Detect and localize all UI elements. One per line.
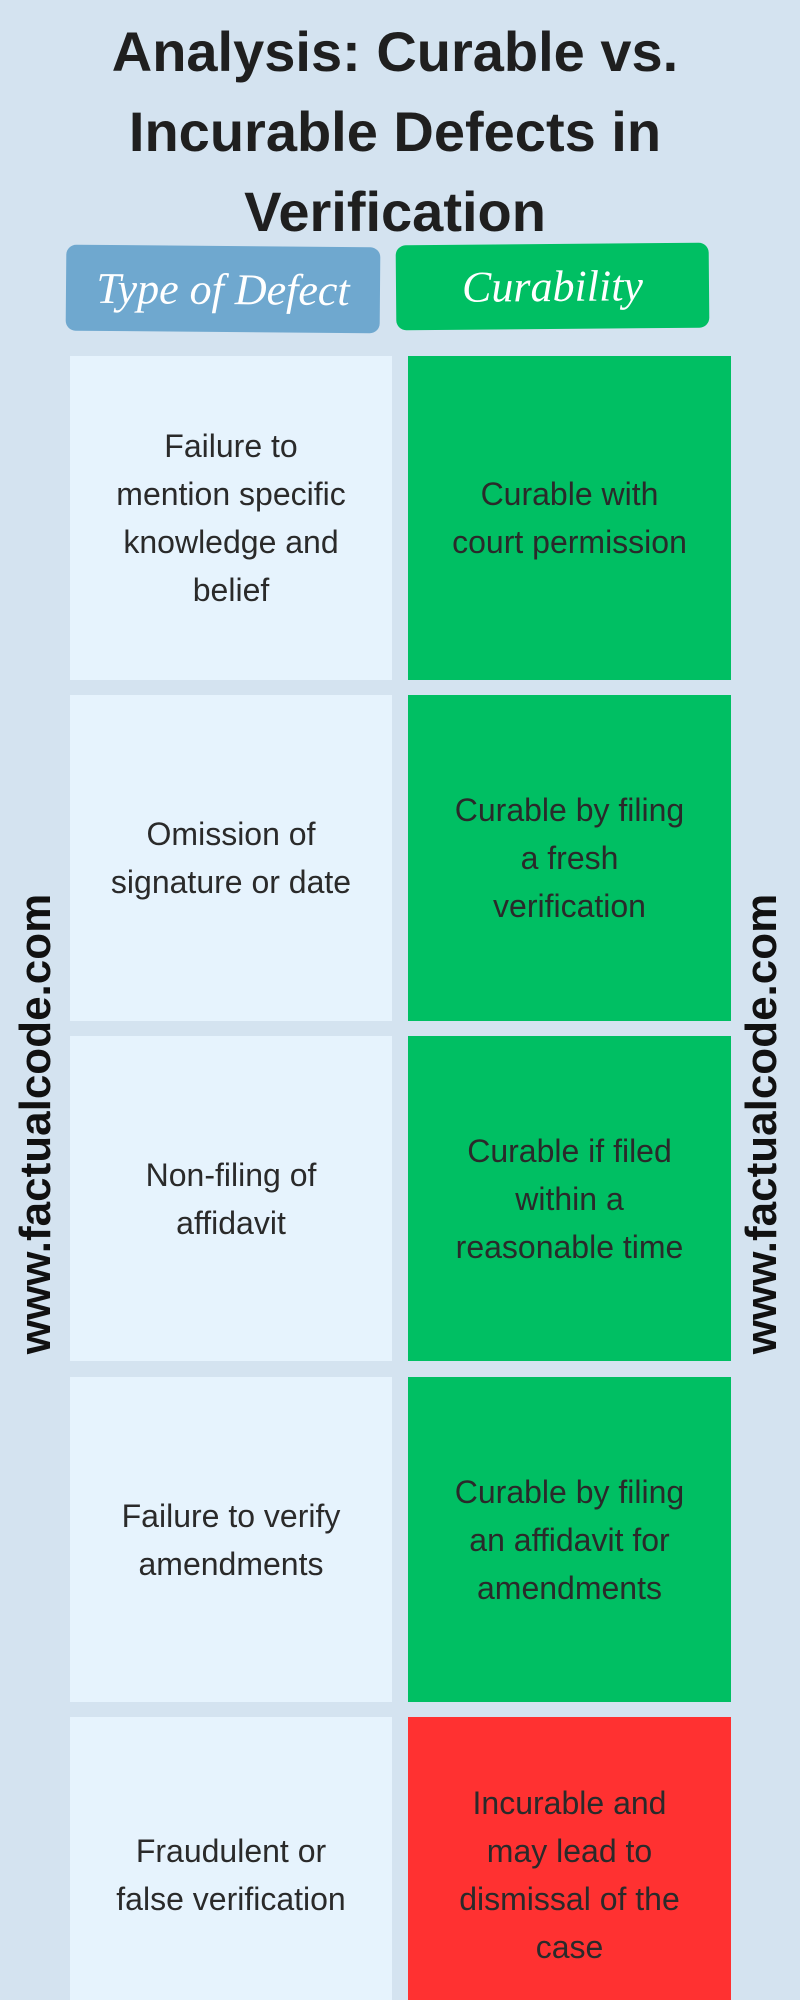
- row 3 defect: Non-filing of affidavit: [146, 1156, 316, 1240]
- row 3 curability: Curable if filed within a reasonable time: [456, 1132, 683, 1264]
- row 5 curability: Incurable and may lead to dismissal of the case: [459, 1784, 680, 1964]
- row 4 defect: Failure to verify amendments: [122, 1498, 340, 1582]
- row 2 curability: Curable by filing a fresh verification: [455, 792, 684, 924]
- row 1 curability: Curable with court permission: [452, 476, 687, 560]
- title: Analysis: Curable vs.: [112, 20, 678, 83]
- title: [112, 20, 678, 243]
- row 2 curability: [408, 695, 731, 1021]
- row 4 curability: Curable by filing an affidavit for amendments: [455, 1474, 684, 1606]
- row 2 defect: [70, 695, 392, 1021]
- row 1 defect: [70, 356, 392, 680]
- header: curability: Curability: [462, 261, 643, 312]
- row 4 curability: [408, 1377, 731, 1702]
- header: type of defect: Type of Defect: [96, 263, 350, 315]
- header: type of defect: [66, 245, 380, 333]
- row 3 curability: [408, 1036, 731, 1361]
- row 5 defect: Fraudulent or false verification: [116, 1832, 346, 1916]
- row 5 curability: [408, 1717, 731, 2000]
- row 1 curability: [408, 356, 731, 680]
- title: Incurable Defects in: [129, 100, 661, 163]
- row 4 defect: [70, 1377, 392, 1702]
- side watermark left: www.factualcode.com: [11, 894, 60, 1354]
- header: curability: [396, 243, 709, 330]
- title: Verification: [244, 180, 546, 243]
- row 2 defect: Omission of signature or date: [111, 816, 351, 900]
- row 3 defect: [70, 1036, 392, 1361]
- row 1 defect: Failure to mention specific knowledge and belief: [116, 428, 346, 608]
- side watermark right: www.factualcode.com: [737, 894, 786, 1354]
- row 5 defect: [70, 1717, 392, 2000]
